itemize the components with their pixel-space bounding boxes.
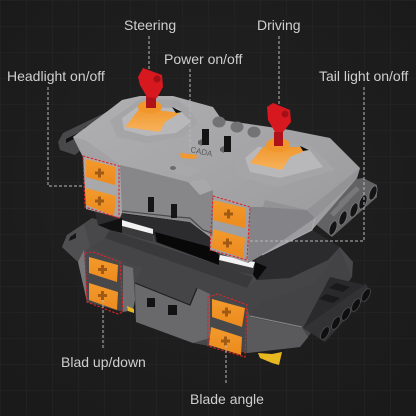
lower left end connector [62, 224, 90, 262]
lower front panel [135, 283, 210, 343]
battery recess [153, 158, 200, 177]
underside dark band [95, 212, 219, 265]
lower top face [90, 238, 352, 317]
label: Driving: Driving [257, 17, 301, 33]
label: Steering: Steering [124, 17, 176, 33]
body silhouette [73, 96, 360, 263]
label: Power on/off: Power on/off [164, 51, 242, 67]
label: Tail light on/off: Tail light on/off [319, 68, 408, 84]
icon: right joystick [267, 103, 291, 146]
front switches [148, 197, 177, 218]
right joystick well [232, 138, 335, 187]
black strip [155, 232, 219, 265]
front face [120, 165, 213, 237]
orange dome [125, 108, 180, 132]
icon: switches [202, 129, 231, 152]
lower right connector beam [303, 277, 372, 342]
left joystick well [110, 98, 198, 143]
left connector [58, 108, 120, 155]
icon: lower switches [147, 298, 177, 315]
label: Headlight on/off: Headlight on/off [7, 68, 105, 84]
right connector [313, 178, 379, 237]
orange blocks: lower right [208, 294, 247, 357]
label: Blade angle: Blade angle [190, 391, 264, 407]
icon: buttons [212, 116, 260, 138]
white strips [122, 220, 255, 268]
right front faces [248, 207, 315, 263]
label: Blad up/down: Blad up/down [61, 354, 146, 370]
orange blocks: lower left [85, 252, 123, 314]
icon: yellow pins [127, 306, 282, 365]
left side shade [73, 137, 120, 165]
shadow under upper unit right [253, 230, 340, 280]
upper controller body [58, 96, 379, 263]
orange blocks: upper left [83, 156, 119, 218]
lower right panel [247, 308, 308, 353]
orange blocks: upper right [210, 196, 250, 260]
leader lines [48, 36, 364, 385]
lower controller body [62, 212, 372, 365]
icon: power indicator [180, 153, 197, 159]
logo text: CADA [190, 145, 214, 159]
grey strips below white [122, 226, 253, 275]
icon: left joystick [138, 68, 163, 108]
plank [105, 230, 253, 288]
